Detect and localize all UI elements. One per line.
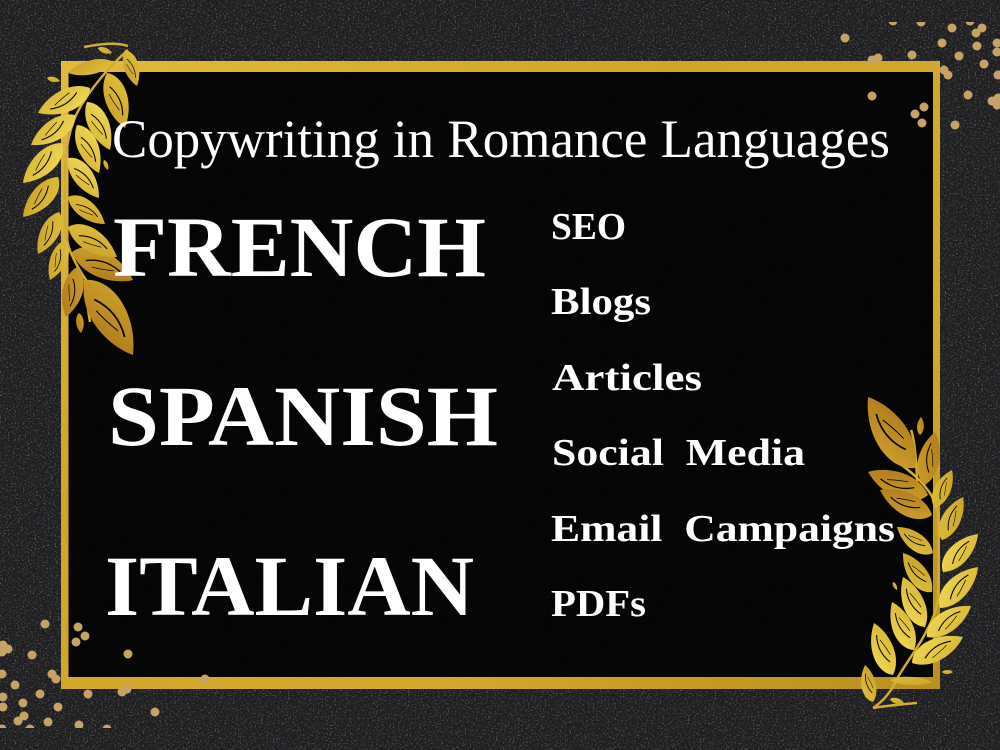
language list xyxy=(105,199,498,634)
gold dots: top right xyxy=(840,16,1000,130)
service: Blogs: Blogs xyxy=(551,281,651,323)
service: Social Media: Social Media xyxy=(552,432,805,474)
language: Italian: ITALIAN xyxy=(105,538,474,634)
gold dots: bottom left xyxy=(0,620,210,734)
black panel inside frame xyxy=(65,66,937,684)
gold rectangular frame xyxy=(61,61,940,689)
gold leaf branch: top left xyxy=(16,44,149,364)
service: SEO: SEO xyxy=(551,206,626,248)
service: Articles: Articles xyxy=(552,357,702,399)
language: French: FRENCH xyxy=(113,199,486,295)
gold leaf branch: bottom right xyxy=(853,389,985,708)
service: Email Campaigns: Email Campaigns xyxy=(551,508,895,550)
language: Spanish: SPANISH xyxy=(108,368,498,464)
title: Copywriting in Romance Languages xyxy=(112,109,890,169)
services list xyxy=(551,206,895,625)
service: PDFs: PDFs xyxy=(551,583,646,625)
